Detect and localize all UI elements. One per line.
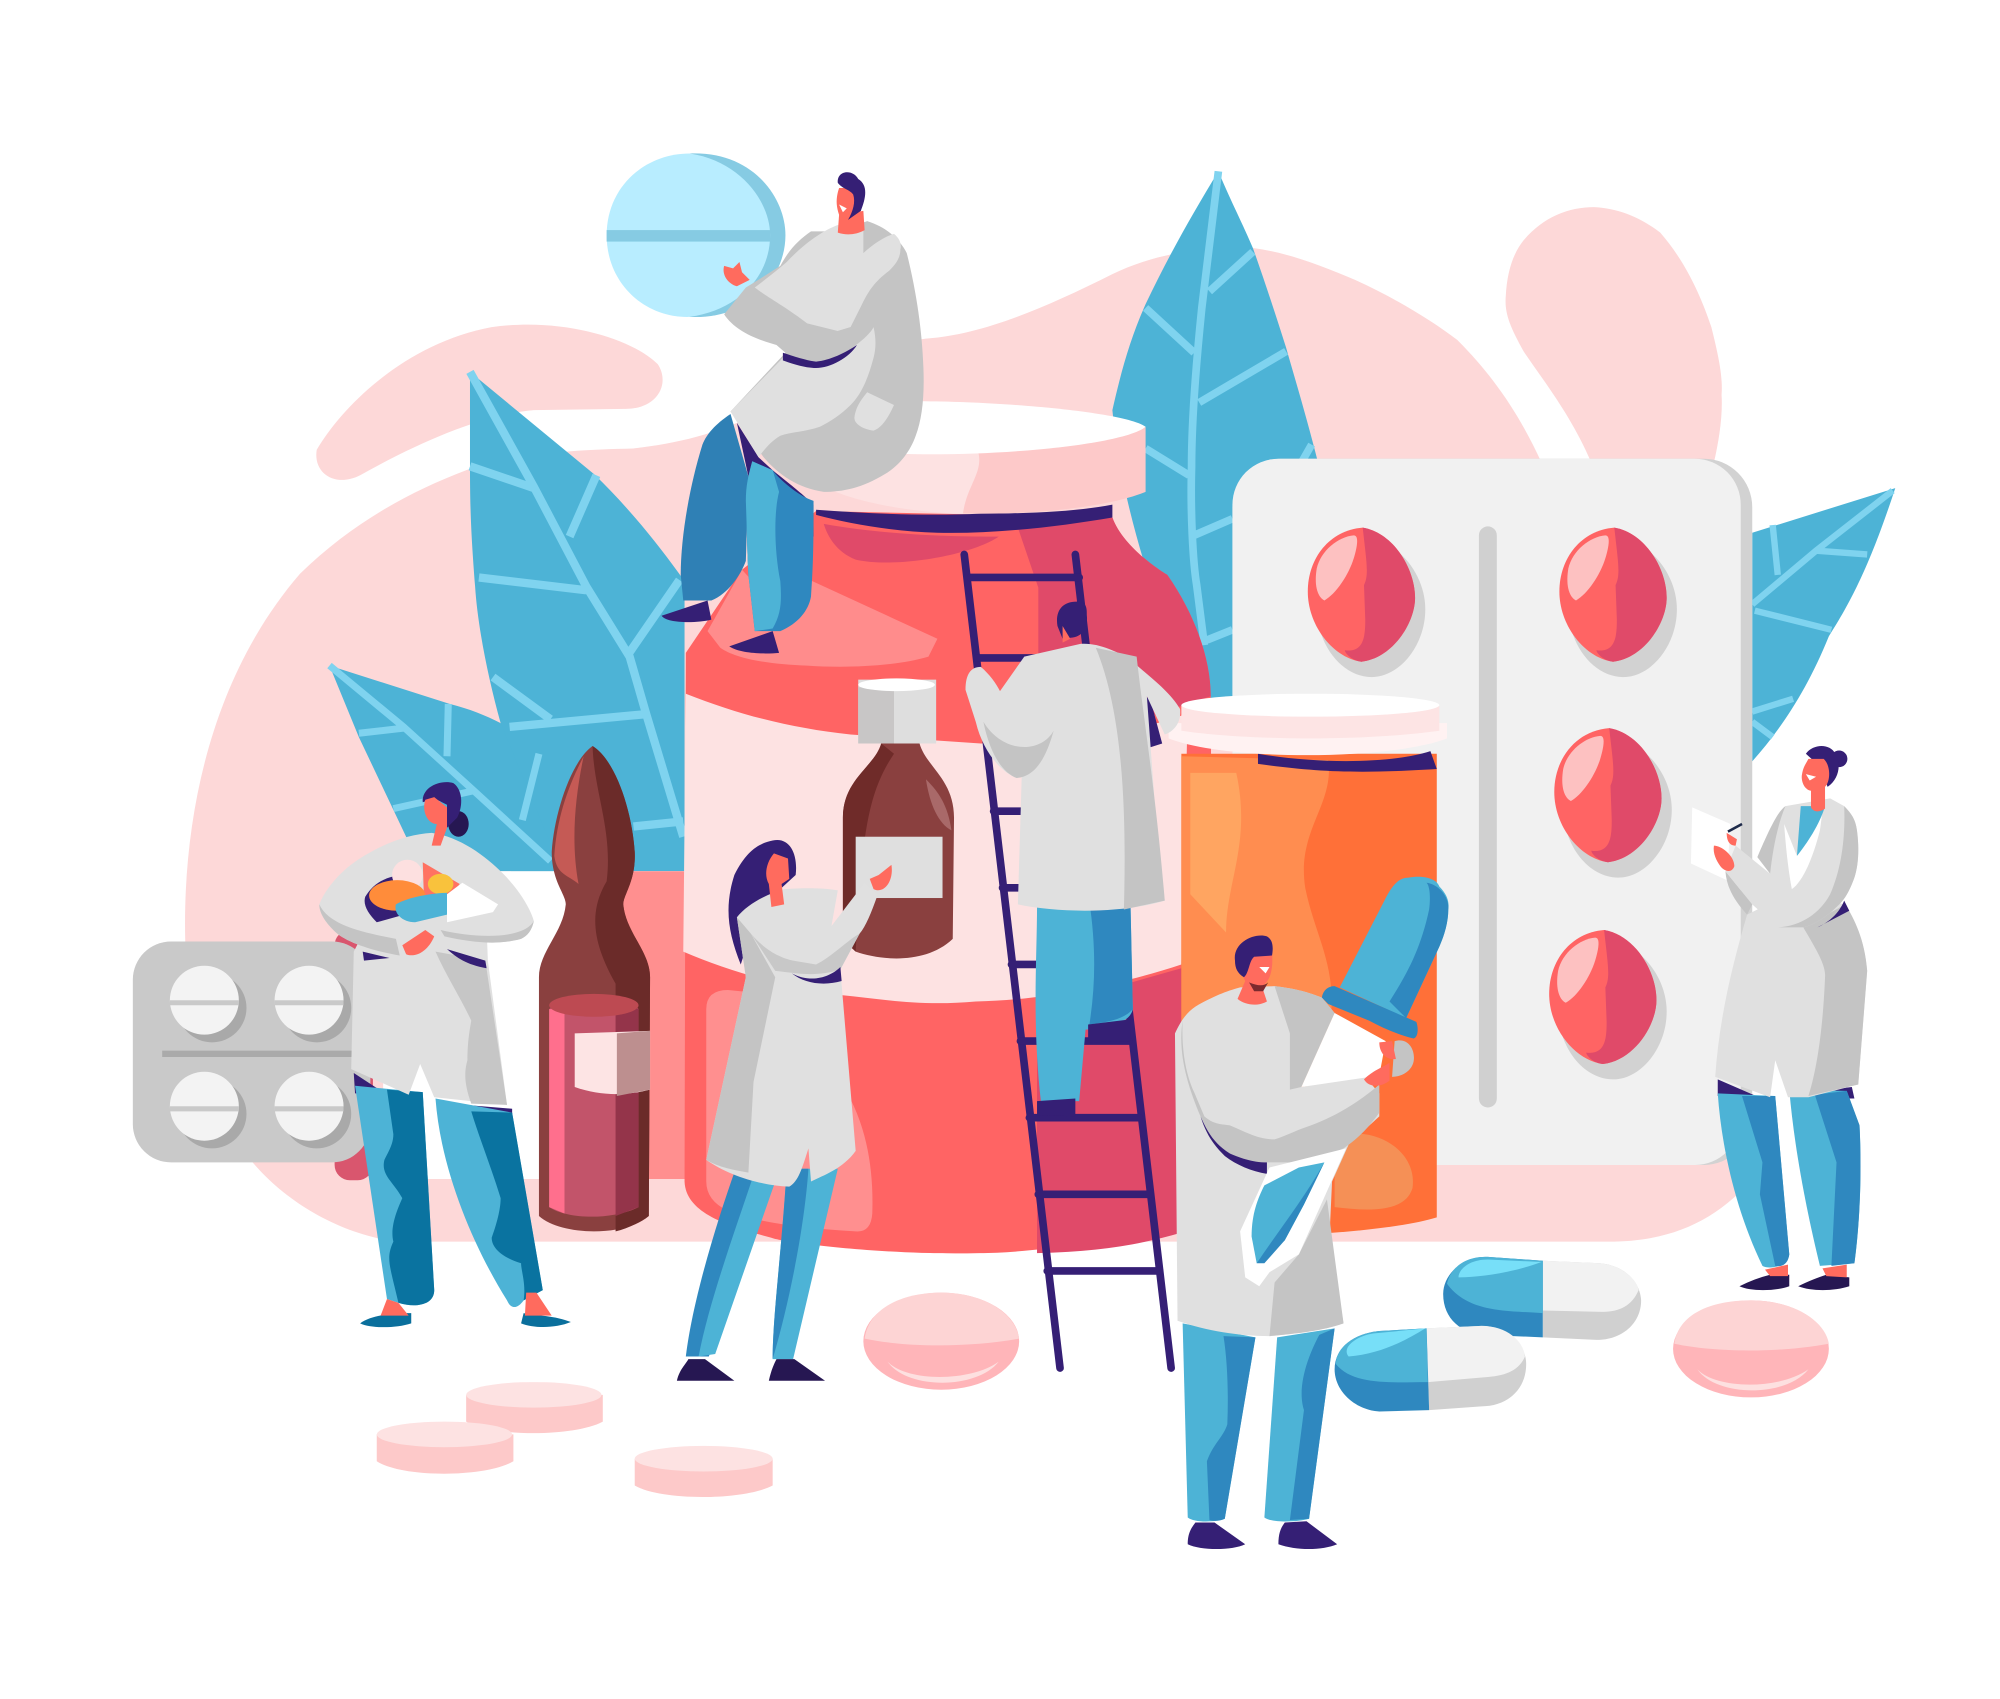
navy waist xyxy=(354,1073,512,1124)
big tablet xyxy=(607,153,785,317)
pill 2 xyxy=(1559,528,1677,677)
pink oval pill right xyxy=(1673,1300,1829,1397)
shoes xyxy=(1739,1275,1849,1290)
character: man climbing ladder xyxy=(966,602,1180,1116)
legs xyxy=(686,1169,775,1357)
character: big man with dropper xyxy=(1175,877,1449,1549)
hair xyxy=(729,840,796,964)
background pink blob xyxy=(185,207,1756,1242)
leaf: small left xyxy=(330,666,562,871)
tablets xyxy=(170,966,351,1148)
shoes xyxy=(677,1359,825,1381)
head xyxy=(837,172,865,234)
pink oval pill centre xyxy=(863,1293,1019,1390)
ladder xyxy=(964,554,1171,1368)
hands xyxy=(1392,1040,1414,1077)
clipboard xyxy=(1691,807,1731,880)
white backdrop behind left woman xyxy=(383,871,686,1179)
pocket xyxy=(854,392,894,431)
legs xyxy=(1036,894,1133,1101)
dropper glass xyxy=(1240,1013,1386,1286)
pill 4 xyxy=(1549,930,1667,1079)
large red jar xyxy=(683,511,1213,1253)
pills bouquet xyxy=(365,860,498,922)
head xyxy=(1235,936,1273,1005)
character: woman with pills xyxy=(319,782,571,1327)
orange bottle xyxy=(1169,694,1447,1237)
leaf: right xyxy=(1752,488,1895,761)
legs xyxy=(1718,1093,1789,1267)
feet xyxy=(360,1313,571,1327)
hand xyxy=(724,262,750,286)
head xyxy=(1802,746,1847,811)
pill 3 xyxy=(1554,728,1672,878)
round flat pills xyxy=(377,1382,773,1497)
hand xyxy=(1714,833,1737,871)
hand xyxy=(402,930,434,955)
small brown bottle xyxy=(843,678,954,958)
left blister pack xyxy=(133,941,370,1162)
sleeve left grey xyxy=(1725,806,1788,915)
legs xyxy=(681,414,748,600)
coat xyxy=(351,894,507,1105)
character: man sitting on jar with tablet xyxy=(607,153,924,653)
character: woman in centre xyxy=(677,840,892,1381)
capsule A xyxy=(1443,1257,1641,1340)
hand xyxy=(870,865,892,890)
arms xyxy=(319,833,534,956)
ampoule xyxy=(539,746,650,1231)
leaf: top centre xyxy=(1112,171,1318,766)
pill 1 xyxy=(1308,528,1425,677)
jar lid xyxy=(816,401,1146,533)
coat xyxy=(1175,986,1379,1336)
coat xyxy=(724,221,924,492)
belt xyxy=(783,345,857,368)
rose panel behind left blister xyxy=(335,930,373,1180)
dropper bulb xyxy=(1322,877,1449,1039)
capsule B xyxy=(1335,1326,1526,1411)
character: woman on right with clipboard xyxy=(1691,746,1867,1290)
legs xyxy=(355,1086,434,1305)
coat xyxy=(966,644,1180,911)
coat xyxy=(706,883,877,1187)
pen xyxy=(1728,824,1742,832)
waist navy xyxy=(1718,1079,1854,1099)
leaf: large left xyxy=(470,372,685,871)
shoes xyxy=(1188,1521,1337,1549)
head xyxy=(1057,602,1087,643)
right blister pack xyxy=(1232,459,1752,1165)
pink panel right of ampoule xyxy=(610,871,687,1179)
jar reflection xyxy=(706,990,872,1231)
coat xyxy=(1715,894,1867,1097)
legs xyxy=(1183,1323,1255,1521)
head xyxy=(766,853,789,907)
navy inner coat xyxy=(997,696,1162,766)
upper coat and arm xyxy=(1725,798,1858,927)
head xyxy=(423,782,469,846)
